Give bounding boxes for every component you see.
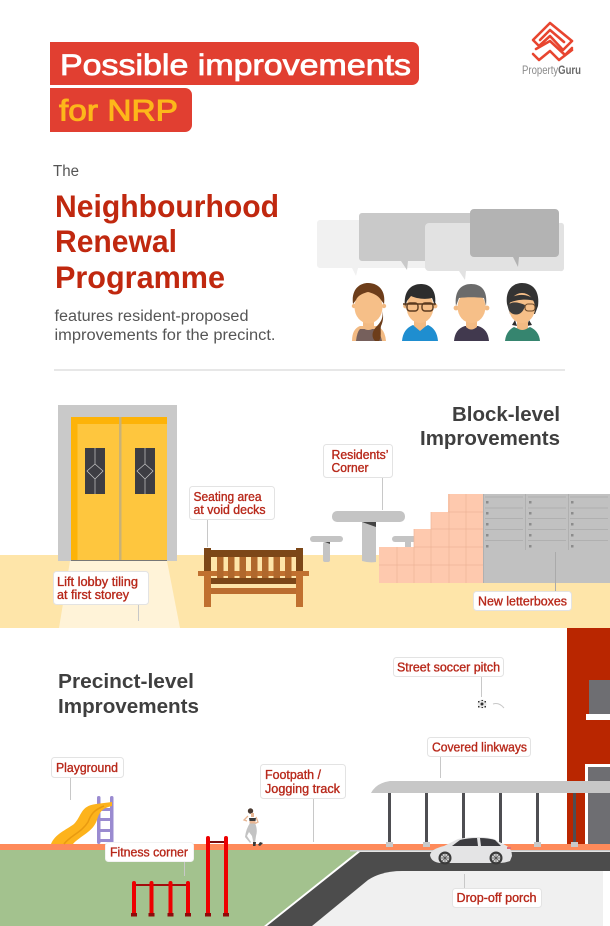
heading: block-level improvements — [420, 403, 560, 450]
lift doors — [58, 405, 177, 561]
building — [567, 628, 610, 845]
intro text: Programme — [55, 259, 225, 295]
label: lift lobby tiling: Lift lobby tiling — [57, 575, 138, 589]
label: seating area: at void decks — [194, 503, 266, 517]
runner — [244, 808, 263, 846]
logo: PropertyGuru — [522, 23, 581, 77]
logo: PropertyGuru: PropertyGuru — [522, 65, 581, 77]
intro text — [53, 163, 279, 344]
fitness equipment — [131, 836, 229, 916]
label: street soccer pitch — [394, 658, 504, 697]
heading: block-level improvements: Improvements — [420, 427, 560, 450]
people — [352, 283, 540, 341]
label: residents' corner: Residents’ — [332, 448, 388, 462]
label: fitness corner — [106, 842, 194, 876]
label: fitness corner: Fitness corner — [110, 846, 188, 860]
covered linkway — [371, 781, 610, 847]
person: woman with bob hair and glasses — [505, 283, 540, 341]
label: covered linkways — [428, 738, 530, 778]
playground slide — [51, 796, 114, 844]
label: covered linkways: Covered linkways — [432, 740, 527, 754]
label: footpath / jogging track: Jogging track — [265, 782, 341, 796]
intro text: The — [53, 163, 79, 180]
person: older man, dark shirt — [454, 284, 489, 341]
heading: precinct-level improvements — [58, 670, 199, 718]
lift window left — [85, 448, 105, 494]
label: playground: Playground — [56, 761, 118, 775]
intro text: improvements for the precinct. — [54, 327, 276, 344]
label: lift lobby tiling: at first storey — [57, 588, 130, 602]
person: woman with ponytail — [352, 283, 386, 341]
title — [50, 42, 419, 132]
label: street soccer pitch: Street soccer pitch — [397, 660, 500, 674]
label: footpath / jogging track — [260, 764, 346, 842]
letterboxes — [483, 494, 610, 583]
label: playground — [52, 758, 124, 800]
heading: block-level improvements: Block-level — [452, 403, 560, 426]
street soccer ball — [478, 700, 504, 708]
intro text: Neighbourhood — [55, 188, 279, 224]
label: drop-off porch — [452, 874, 542, 908]
intro text: Renewal — [55, 223, 177, 259]
label: new letterboxes — [474, 552, 572, 610]
label: seating area: Seating area — [194, 490, 262, 504]
label: lift lobby tiling — [54, 572, 148, 621]
heading: precinct-level improvements: Improvements — [58, 695, 199, 718]
label: new letterboxes: New letterboxes — [478, 594, 567, 608]
label: footpath / jogging track: Footpath / — [265, 768, 322, 782]
title: for NRP — [59, 94, 178, 128]
label: residents' corner — [324, 444, 392, 510]
bench — [198, 548, 309, 607]
lift window right — [135, 448, 155, 494]
label: drop-off porch: Drop-off porch — [456, 891, 537, 905]
residents' corner table and stools — [310, 511, 422, 562]
ground: lawn, path, road and porch — [0, 844, 610, 926]
pink tiled wall — [379, 494, 483, 583]
title: Possible improvements — [60, 49, 411, 82]
label: seating area — [190, 486, 274, 547]
heading: precinct-level improvements: Precinct-level — [58, 670, 194, 693]
divider — [54, 370, 565, 371]
label: residents' corner: Corner — [332, 461, 368, 475]
intro text: features resident-proposed — [54, 308, 248, 325]
car — [430, 837, 512, 864]
person: man with glasses, blue shirt — [402, 284, 438, 341]
speech bubbles — [317, 209, 564, 280]
panel: block-level floor — [0, 555, 610, 628]
